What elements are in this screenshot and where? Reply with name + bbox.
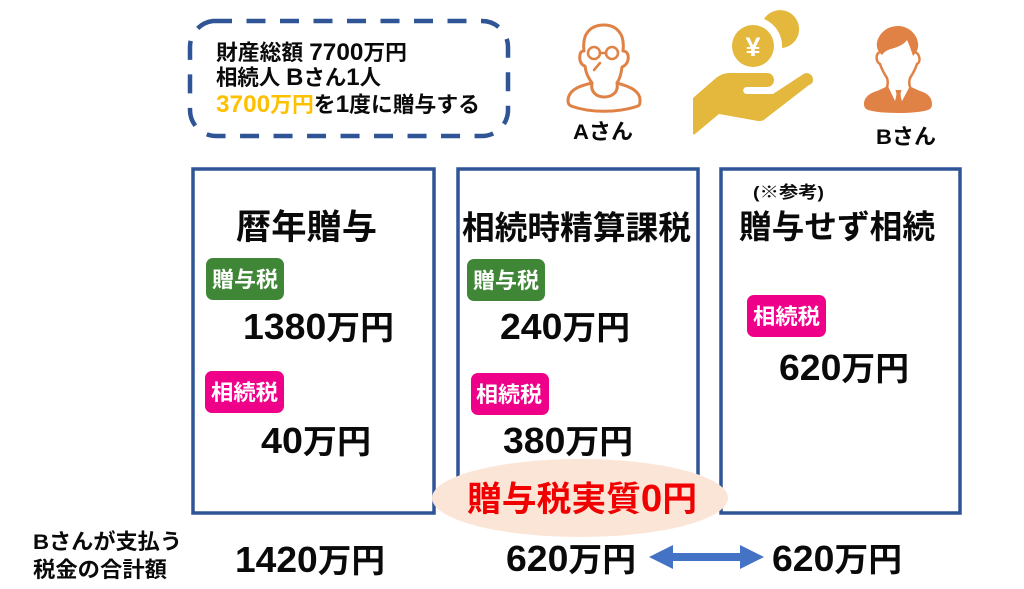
tag: gift tax: 贈与税	[473, 269, 539, 293]
tag: inheritance tax	[471, 373, 549, 415]
value: inheritance tax: 40万円	[261, 420, 371, 461]
total: 相続時精算課税: 620万円	[506, 538, 636, 579]
reference note: (※参考)	[753, 183, 824, 202]
callout: effective zero gift tax	[432, 459, 728, 537]
heading: 贈与せず相続	[739, 209, 935, 245]
tag: inheritance tax: 相続税	[211, 381, 279, 405]
callout: conditions: 相続人 Bさん1人	[216, 64, 381, 91]
tag: gift tax: 贈与税	[212, 268, 278, 292]
row label: Bさんが支払う	[33, 529, 182, 554]
row label: 税金の合計額	[33, 558, 168, 582]
heading: 暦年贈与	[236, 209, 377, 247]
panel: 暦年贈与	[193, 169, 434, 513]
icon: hand with yen coins: ¥	[745, 32, 761, 62]
callout: effective zero gift tax: 贈与税実質0円	[467, 478, 697, 520]
icon: hand with yen coins	[693, 10, 813, 135]
row label	[33, 529, 182, 582]
callout: conditions	[190, 21, 508, 136]
icon: person B	[864, 26, 932, 113]
tag: inheritance tax: 相続税	[476, 383, 542, 407]
tag: inheritance tax: 相続税	[753, 305, 821, 329]
value: inheritance tax: 380万円	[503, 420, 633, 461]
value: inheritance tax: 620万円	[779, 347, 909, 388]
panel: 相続時精算課税	[458, 169, 698, 513]
callout: conditions: 財産総額 7700万円	[216, 39, 407, 66]
total: 贈与せず相続: 620万円	[772, 538, 902, 579]
arrow: equal amounts	[649, 545, 764, 569]
total: 暦年贈与: 1420万円	[235, 539, 385, 580]
tag: gift tax	[467, 259, 545, 301]
value: gift tax: 1380万円	[243, 306, 394, 347]
icon: person A	[568, 25, 640, 111]
tag: inheritance tax	[747, 295, 826, 337]
heading: 相続時精算課税	[462, 210, 691, 246]
tag: gift tax	[206, 258, 284, 300]
panel: 贈与せず相続	[721, 169, 960, 513]
callout: conditions: 3700万円を1度に贈与する	[216, 91, 480, 118]
label: B: Bさん	[876, 125, 936, 149]
tag: inheritance tax	[205, 371, 284, 413]
value: gift tax: 240万円	[500, 306, 630, 347]
label: A: Aさん	[573, 120, 633, 144]
